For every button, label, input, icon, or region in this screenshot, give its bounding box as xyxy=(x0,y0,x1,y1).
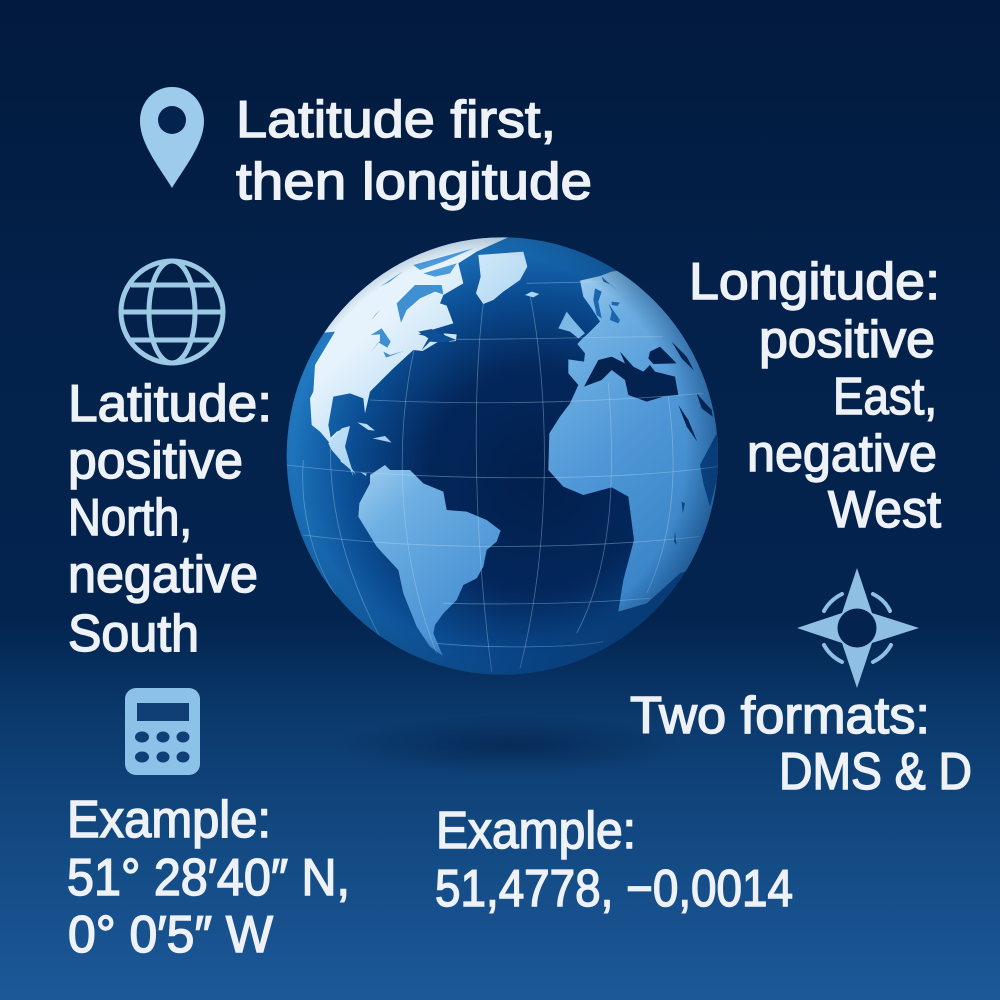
text: longitude sign rule: positive xyxy=(759,311,935,369)
seas and lakes xyxy=(371,248,720,545)
text: latitude sign rule xyxy=(68,375,272,663)
Central America xyxy=(328,426,356,475)
text: longitude sign rule xyxy=(689,253,942,539)
text: latitude sign rule: South xyxy=(68,605,199,663)
text: latitude sign rule: Latitude: xyxy=(68,375,272,433)
globe xyxy=(287,235,737,675)
continents xyxy=(300,235,737,656)
Great Lakes xyxy=(371,328,404,358)
text: latitude sign rule: North, xyxy=(68,489,192,547)
Baltic and North Sea xyxy=(593,277,620,323)
text: longitude sign rule: West xyxy=(828,481,942,539)
Hudson Bay xyxy=(397,285,443,323)
graticule xyxy=(287,282,717,672)
text: DMS example: 51° 28′40″ N, xyxy=(67,849,350,907)
text: decimal example: Example: xyxy=(436,802,636,860)
icon: map pin xyxy=(140,87,204,188)
South America xyxy=(358,465,501,656)
Mediterranean xyxy=(584,352,678,402)
Caspian, Red Sea and Gulf xyxy=(672,342,713,442)
heading: latitude first xyxy=(236,91,592,211)
globe shadow xyxy=(335,715,685,775)
Greenland xyxy=(476,252,527,304)
icon: compass star xyxy=(797,568,919,688)
icon: calculator xyxy=(125,688,200,775)
eastern limb shadow xyxy=(700,434,718,506)
text: longitude sign rule: East, xyxy=(833,368,937,426)
sphere rim shading xyxy=(287,237,718,675)
Black Sea xyxy=(648,347,677,364)
text: latitude sign rule: positive xyxy=(68,432,243,490)
text: two formats xyxy=(630,687,972,801)
Arctic channels xyxy=(372,248,473,320)
text: decimal example: 51,4778, −0,0014 xyxy=(435,860,793,918)
ocean sphere xyxy=(287,237,718,675)
text: longitude sign rule: negative xyxy=(747,425,937,483)
Caribbean islands xyxy=(357,422,392,476)
icon: globe grid xyxy=(121,261,223,363)
Iceland xyxy=(525,292,539,297)
Africa and Eurasia xyxy=(548,270,718,612)
heading: latitude first: Latitude first, xyxy=(236,91,556,149)
Gulf of St Lawrence xyxy=(418,329,457,350)
text: decimal example xyxy=(435,802,793,918)
text: DMS example: 0° 0′5″ W xyxy=(68,906,273,964)
text: latitude sign rule: negative xyxy=(68,546,258,604)
Newfoundland xyxy=(443,333,457,342)
text: DMS example: Example: xyxy=(67,791,271,849)
text: two formats: DMS & D xyxy=(779,743,972,801)
text: DMS example xyxy=(67,791,350,964)
text: two formats: Two formats: xyxy=(630,687,930,745)
text: longitude sign rule: Longitude: xyxy=(689,253,940,311)
heading: latitude first: then longitude xyxy=(236,153,592,211)
Madagascar shadow xyxy=(674,502,685,545)
North America xyxy=(300,235,513,477)
British Isles xyxy=(558,312,585,338)
